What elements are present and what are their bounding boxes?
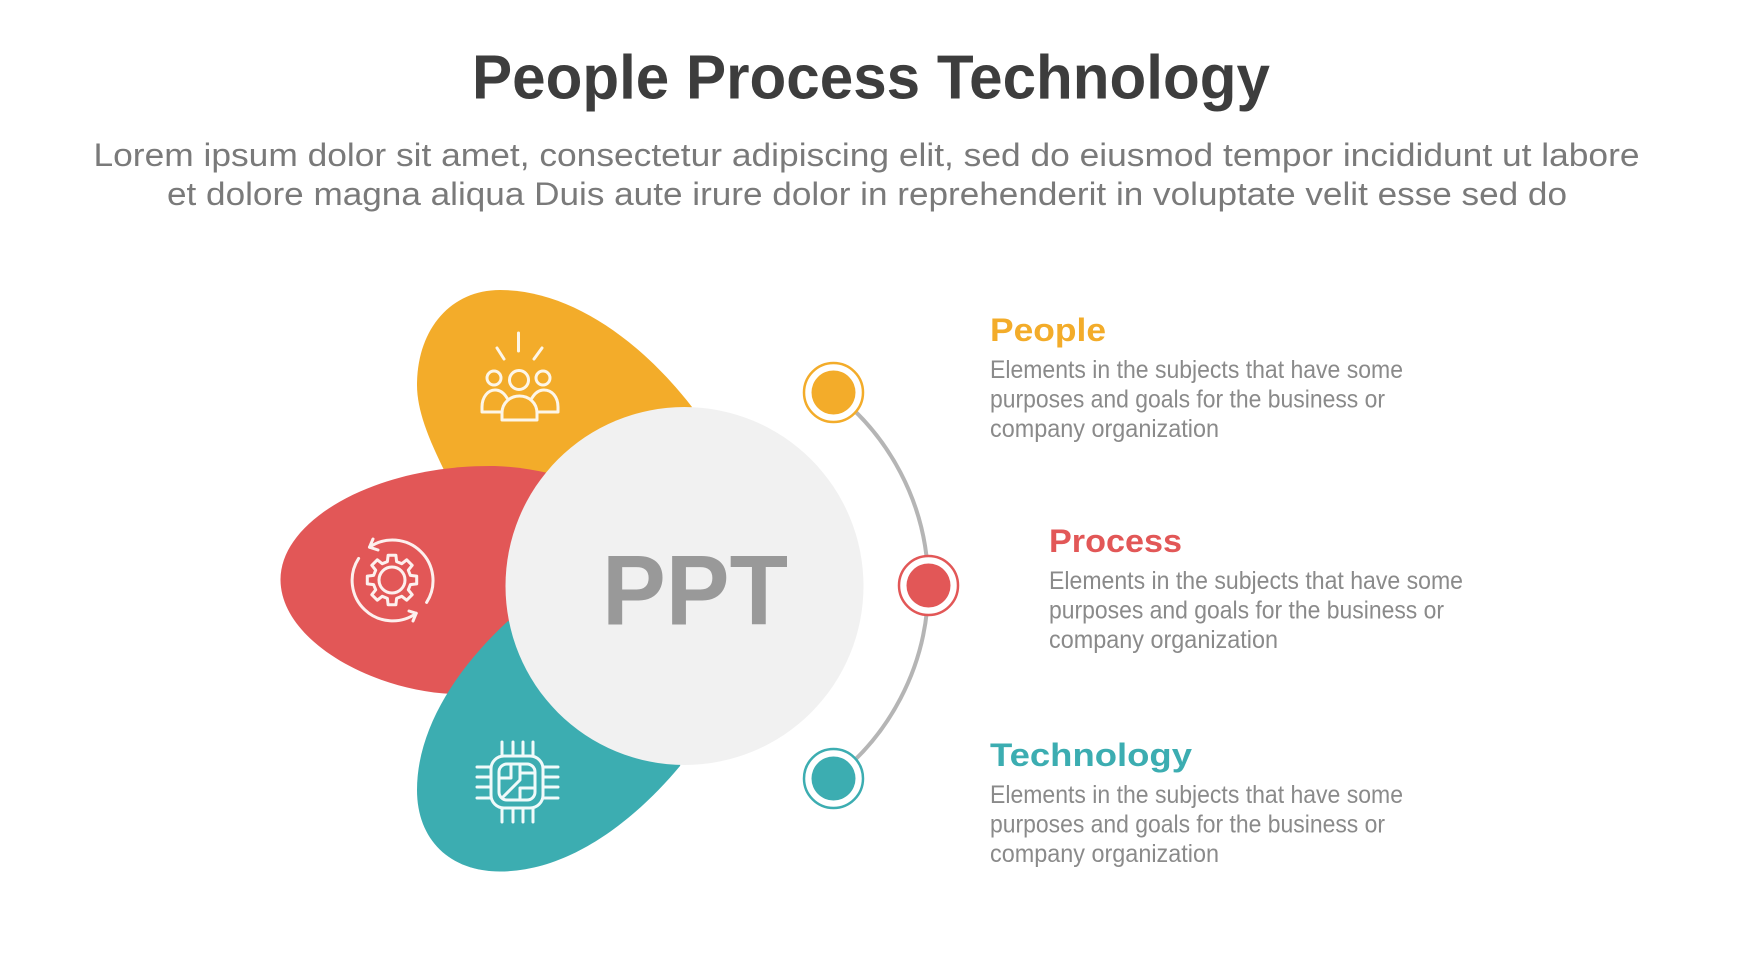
text block: technology: company organization — [990, 840, 1219, 868]
text block: technology: Technology — [990, 737, 1192, 773]
text block: people — [990, 312, 1403, 443]
subtitle text — [94, 137, 1639, 212]
marker: technology — [804, 749, 863, 808]
petal: process (red) — [280, 466, 600, 694]
icon: people — [482, 333, 558, 420]
title: People Process Technology — [472, 44, 1270, 112]
text block: process: Elements in the subjects that have some — [1049, 567, 1463, 595]
marker: process — [899, 556, 958, 615]
text block: technology: Elements in the subjects that have some — [990, 781, 1403, 809]
center circle — [506, 407, 864, 765]
subtitle text: Lorem ipsum dolor sit amet, consectetur adipiscing elit, sed do eiusmod tempor incididunt ut labore — [94, 137, 1639, 173]
text block: people: Elements in the subjects that have some — [990, 356, 1403, 384]
petal: people (orange) — [417, 290, 692, 520]
text block: process: purposes and goals for the business or — [1049, 596, 1444, 624]
connector arc — [834, 392, 928, 778]
text block: process — [1049, 523, 1463, 654]
text block: technology — [990, 737, 1403, 868]
text block: process: company organization — [1049, 626, 1278, 654]
icon: gear with cycle arrows — [352, 539, 433, 621]
text block: technology: purposes and goals for the business or — [990, 810, 1385, 838]
marker: people — [804, 363, 863, 422]
text block: people: company organization — [990, 415, 1219, 443]
petal: technology (teal) — [417, 621, 700, 872]
text block: people: purposes and goals for the business or — [990, 386, 1385, 414]
subtitle text: et dolore magna aliqua Duis aute irure dolor in reprehenderit in voluptate velit esse sed do — [167, 176, 1567, 212]
center label PPT: PPT — [602, 534, 788, 646]
icon: microchip — [477, 742, 558, 822]
text block: process: Process — [1049, 523, 1182, 559]
text block: people: People — [990, 312, 1106, 348]
